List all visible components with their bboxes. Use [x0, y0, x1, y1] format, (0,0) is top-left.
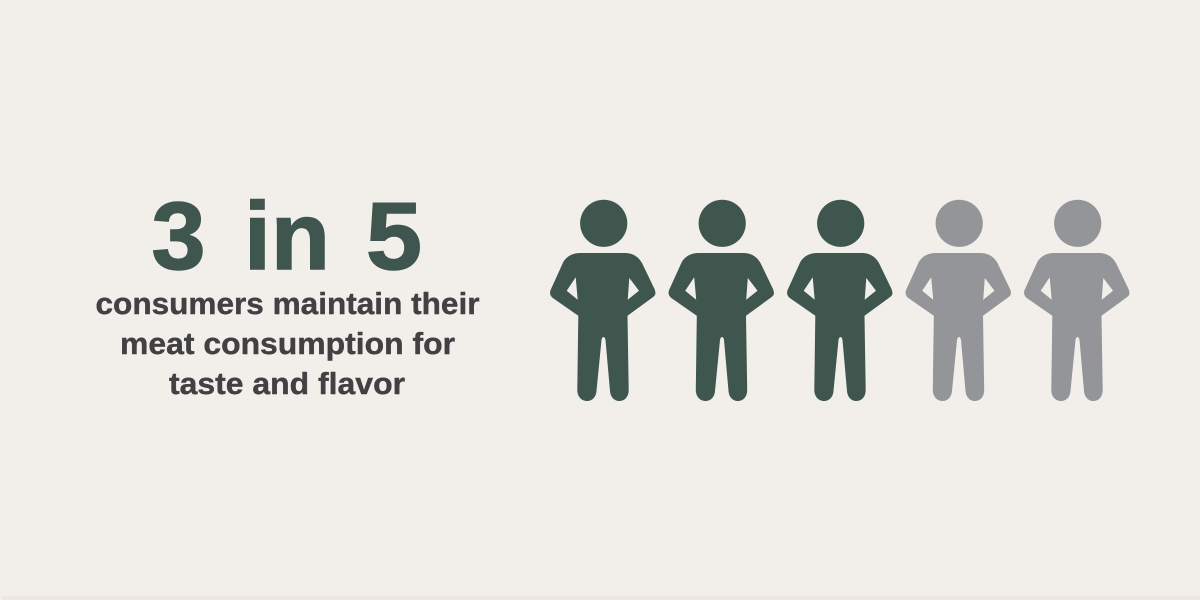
description text: taste and flavor	[169, 366, 405, 401]
description text	[96, 286, 480, 401]
headline: 3 in 5: 3	[152, 183, 206, 290]
icon: person 5 (grey)	[1024, 200, 1129, 401]
icon: person 2 (highlighted)	[669, 200, 774, 401]
headline: 3 in 5: 5	[366, 183, 422, 290]
headline: 3 in 5	[152, 183, 422, 290]
icon: person 3 (highlighted)	[787, 200, 892, 401]
headline: 3 in 5: in	[244, 183, 330, 290]
icon: person 4 (grey)	[906, 200, 1011, 401]
icon: person 1 (highlighted)	[550, 200, 655, 401]
description text: consumers maintain their	[96, 286, 480, 321]
description text: meat consumption for	[120, 326, 455, 361]
